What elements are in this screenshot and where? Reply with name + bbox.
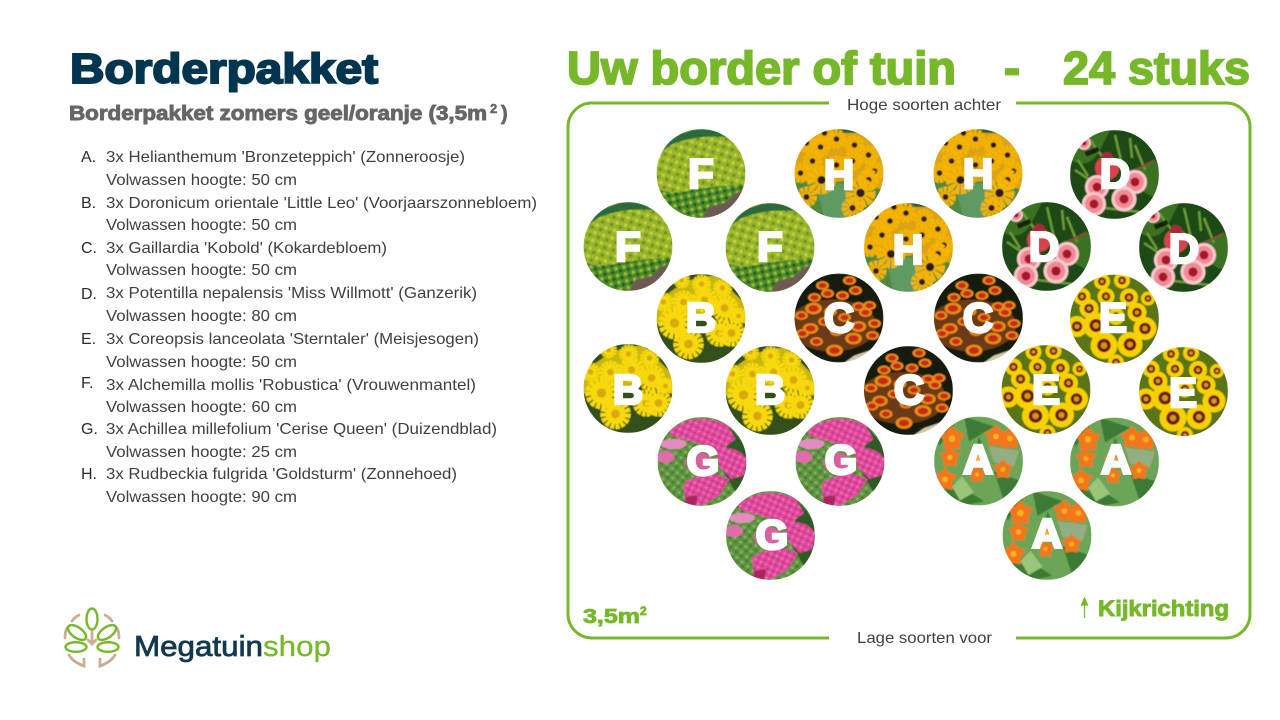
plant H circles: H bbox=[963, 150, 993, 197]
area label: 3,5m2: 3,5m bbox=[583, 606, 640, 628]
plant B circles: B bbox=[613, 366, 643, 413]
heading: Uw border of tuin - 24 stuks: - bbox=[1004, 42, 1020, 94]
plant list: Volwassen hoogte: 50 cm bbox=[106, 172, 297, 189]
plant D circles: D bbox=[1029, 223, 1059, 270]
plant E circles: E bbox=[1032, 366, 1060, 413]
plant list: 3x Doronicum orientale 'Little Leo' (Voorjaarszonnebloem) bbox=[106, 195, 537, 212]
logo: Megatuinshop bbox=[65, 608, 331, 666]
plant G circles bbox=[656, 417, 884, 580]
label: low species in front: Lage soorten voor bbox=[857, 630, 993, 647]
plant list: Volwassen hoogte: 80 cm bbox=[106, 308, 297, 325]
plant G circles: G bbox=[756, 511, 788, 558]
plant list: 3x Coreopsis lanceolata 'Sterntaler' (Meisjesogen) bbox=[106, 331, 479, 348]
area label: 3,5m2 bbox=[583, 604, 647, 628]
heading: Uw border of tuin - 24 stuks: Uw border of tuin bbox=[567, 42, 956, 94]
plant list: Volwassen hoogte: 50 cm bbox=[106, 217, 297, 234]
plant C circles bbox=[788, 274, 1023, 435]
plant list: 3x Potentilla nepalensis 'Miss Willmott' (Ganzerik) bbox=[106, 285, 477, 302]
plant list: 3x Gaillardia 'Kobold' (Kokardebloem) bbox=[106, 240, 387, 257]
plant G circles: G bbox=[687, 437, 719, 484]
plant E circles: E bbox=[1099, 294, 1127, 341]
plant list: E. bbox=[81, 331, 96, 348]
plant list: Volwassen hoogte: 25 cm bbox=[106, 444, 297, 461]
plant H circles bbox=[794, 126, 1022, 292]
heading: Uw border of tuin - 24 stuks: 24 stuks bbox=[1063, 42, 1250, 94]
heading: Uw border of tuin - 24 stuks bbox=[567, 42, 1250, 94]
plant C circles: C bbox=[824, 294, 854, 341]
plant F circles bbox=[584, 129, 814, 292]
plant list: D. bbox=[81, 286, 97, 303]
plant D circles bbox=[1002, 130, 1228, 292]
plant list: Volwassen hoogte: 50 cm bbox=[106, 262, 297, 279]
plant E circles bbox=[998, 272, 1228, 443]
plant list: Volwassen hoogte: 90 cm bbox=[106, 489, 297, 506]
plant C circles: C bbox=[963, 294, 993, 341]
plant A circles bbox=[933, 416, 1159, 580]
logo: Megatuinshop: shop bbox=[263, 631, 331, 663]
title: Borderpakket: Borderpakket bbox=[70, 45, 378, 92]
plant list: Volwassen hoogte: 50 cm bbox=[106, 354, 297, 371]
plant A circles: A bbox=[963, 436, 993, 483]
plant list: H. bbox=[81, 466, 97, 483]
plant list: B. bbox=[81, 195, 96, 212]
label: tall species at back: Hoge soorten achter bbox=[847, 97, 1002, 114]
plant C circles: C bbox=[894, 366, 924, 413]
plant F circles: F bbox=[757, 223, 783, 270]
plant B circles bbox=[584, 274, 814, 435]
plant G circles: G bbox=[825, 436, 857, 483]
viewing direction arrow and label: Kijkrichting bbox=[1098, 596, 1229, 621]
plant A circles: A bbox=[1101, 436, 1131, 483]
plant H circles: H bbox=[893, 226, 923, 273]
plant B circles: B bbox=[755, 366, 785, 413]
plant H circles: H bbox=[824, 151, 854, 198]
plant list: Volwassen hoogte: 60 cm bbox=[106, 399, 297, 416]
plant B circles: B bbox=[686, 294, 716, 341]
subtitle: package name: ) bbox=[501, 103, 508, 125]
area label: 3,5m2: 2 bbox=[640, 604, 647, 618]
plant list: 3x Helianthemum 'Bronzeteppich' (Zonneroosje) bbox=[106, 149, 465, 166]
plant list: F. bbox=[81, 375, 93, 392]
plant F circles: F bbox=[615, 223, 641, 270]
subtitle: package name: Borderpakket zomers geel/oranje (3,5m bbox=[69, 103, 487, 125]
plant list: 3x Rudbeckia fulgrida 'Goldsturm' (Zonnehoed) bbox=[106, 466, 457, 483]
panel: planting plan frame bbox=[568, 97, 1250, 644]
plant list: 3x Alchemilla mollis 'Robustica' (Vrouwenmantel) bbox=[106, 377, 476, 394]
plant A circles: A bbox=[1032, 510, 1062, 557]
logo: Megatuinshop: Megatuin bbox=[134, 631, 263, 663]
plant D circles: D bbox=[1169, 225, 1199, 272]
plant D circles: D bbox=[1100, 150, 1130, 197]
subtitle: package name: 2 bbox=[490, 101, 497, 116]
plant list bbox=[81, 149, 537, 506]
plant E circles: E bbox=[1169, 369, 1197, 416]
plant F circles: F bbox=[688, 150, 714, 197]
plant list: C. bbox=[81, 240, 97, 257]
plant list: G. bbox=[81, 421, 98, 438]
plant list: 3x Achillea millefolium 'Cerise Queen' (Duizendblad) bbox=[106, 421, 497, 438]
plant list: A. bbox=[81, 149, 96, 166]
